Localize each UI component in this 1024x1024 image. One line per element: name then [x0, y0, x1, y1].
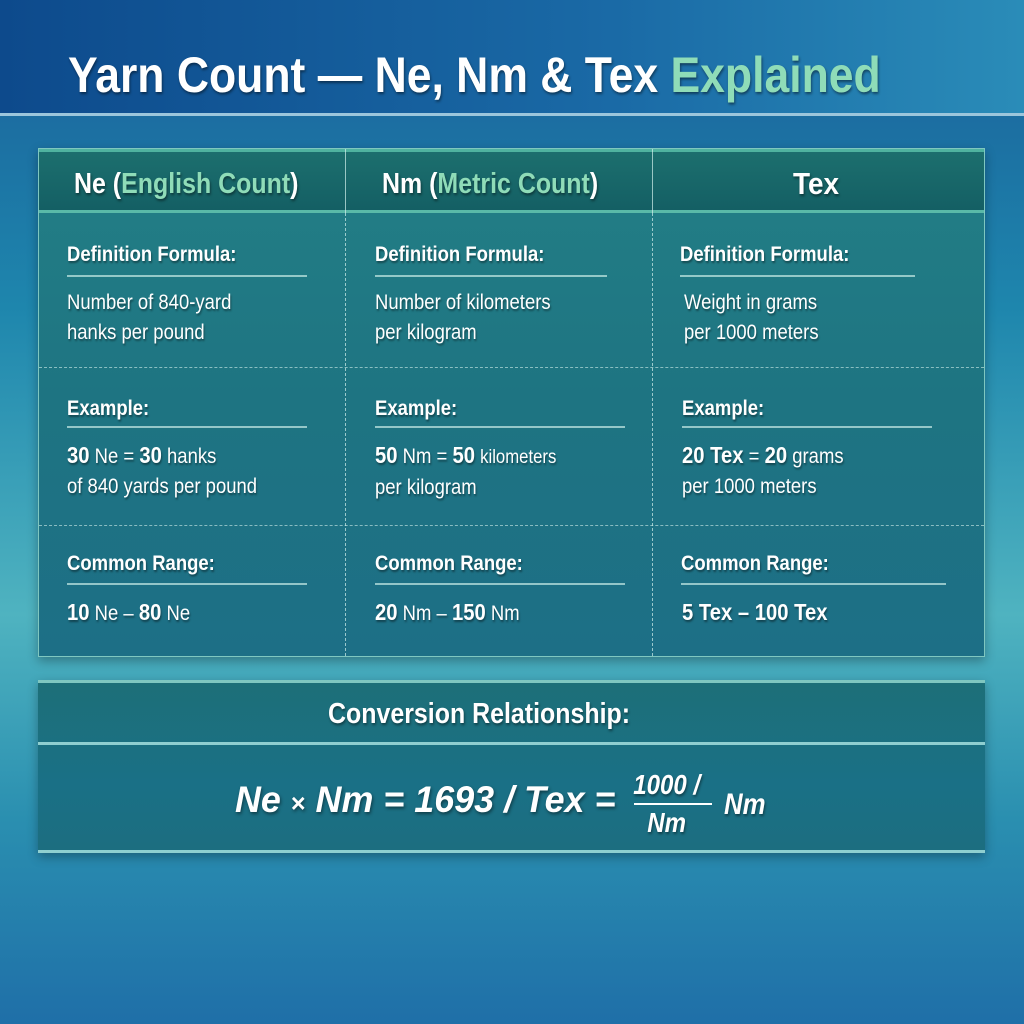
Nm example: Example:: [375, 397, 457, 420]
column Ne: 30 Ne = 30 hanks: [67, 442, 216, 468]
header: Tex: Tex: [793, 166, 839, 201]
column Tex: Weight in grams: [684, 291, 817, 314]
column Tex: per 1000 meters: [682, 475, 817, 498]
conversion heading: Conversion Relationship:: [328, 698, 630, 730]
header: Nm: Nm (Metric Count): [382, 168, 598, 200]
title: Yarn Count — Ne, Nm & Tex Explained: [68, 47, 881, 103]
column Tex: [680, 243, 946, 625]
column Tex: 5 Tex – 100 Tex: [682, 599, 828, 625]
conversion panel: Nm: [724, 788, 766, 821]
table panel: [38, 148, 985, 657]
column Ne: hanks per pound: [67, 321, 205, 344]
fraction: [633, 769, 712, 838]
column Tex: 20 Tex = 20 grams: [682, 442, 844, 468]
conversion panel: [38, 680, 985, 853]
column Nm: per kilogram: [375, 321, 477, 344]
column Nm: Number of kilometers: [375, 291, 551, 314]
column Nm: 50 Nm = 50 kilometers: [375, 442, 556, 468]
Nm range: Common Range:: [375, 552, 523, 575]
fraction: 1000 /: [633, 769, 700, 800]
column Ne: of 840 yards per pound: [67, 475, 257, 498]
header band: [0, 0, 1024, 116]
fraction: Nm: [647, 807, 686, 838]
column Nm: 20 Nm – 150 Nm: [375, 599, 520, 625]
header column dividers: [345, 149, 346, 213]
header: Ne: Ne (English Count): [74, 168, 298, 200]
column Ne: 10 Ne – 80 Ne: [67, 599, 190, 625]
Tex definition: Definition Formula:: [680, 243, 849, 266]
Ne range: Common Range:: [67, 552, 215, 575]
column Ne: [67, 243, 307, 625]
Ne definition: Definition Formula:: [67, 243, 236, 266]
Nm definition: Definition Formula:: [375, 243, 544, 266]
column Ne: Number of 840-yard: [67, 291, 231, 314]
Ne example: Example:: [67, 397, 149, 420]
column Nm: [375, 243, 625, 625]
formula: Ne × Nm = 1693 / Tex =: [235, 779, 615, 820]
column Nm: per kilogram: [375, 476, 477, 499]
Tex example: Example:: [682, 397, 764, 420]
Tex range: Common Range:: [681, 552, 829, 575]
header row: [39, 149, 984, 213]
column Tex: per 1000 meters: [684, 321, 819, 344]
